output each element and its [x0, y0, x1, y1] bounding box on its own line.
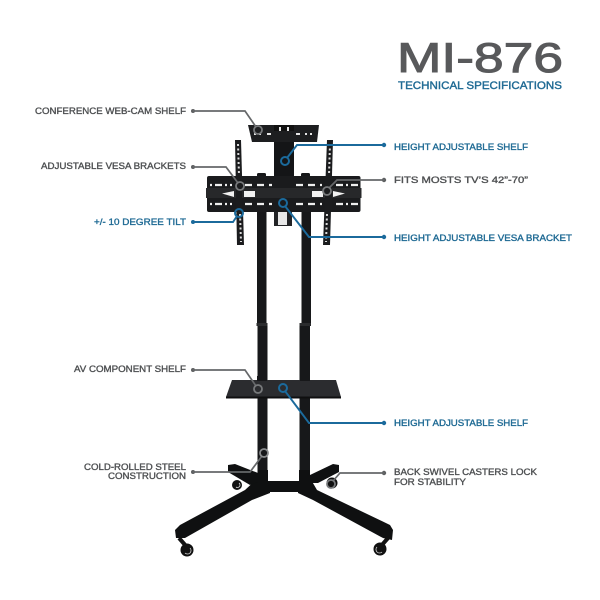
callout: back swivel casters: BACK SWIVEL CASTERS LOCK — [394, 467, 537, 477]
base with casters — [175, 464, 393, 556]
AV component shelf — [226, 376, 341, 398]
callout: AV component shelf: AV COMPONENT SHELF — [74, 364, 187, 374]
callout: height adjustable shelf (lower) — [279, 384, 529, 428]
callout: cold-rolled steel construction: CONSTRUCTION — [108, 471, 186, 481]
callout: conference web-cam shelf — [35, 106, 262, 134]
stand poles — [256, 212, 311, 485]
casters — [179, 478, 388, 556]
title: MI-876 — [397, 34, 563, 81]
callout: AV component shelf — [74, 364, 262, 393]
callout: back swivel casters: FOR STABILITY — [394, 477, 466, 487]
callout: tilt: +/- 10 DEGREE TILT — [94, 217, 187, 227]
VESA horizontal rails — [206, 173, 362, 212]
callout: adjustable VESA brackets — [41, 161, 244, 190]
callout: height adjustable shelf (top): HEIGHT ADJUSTABLE SHELF — [394, 142, 529, 152]
VESA vertical brackets — [235, 140, 333, 245]
callout: height adjustable shelf (top) — [281, 142, 529, 165]
callout: back swivel casters — [327, 467, 537, 488]
callout: fits TV sizes — [323, 175, 528, 195]
webcam shelf — [248, 125, 319, 178]
callout: cold-rolled steel construction: COLD-ROLLED STEEL — [84, 462, 186, 472]
callout: conference web-cam shelf: CONFERENCE WEB-CAM SHELF — [35, 106, 187, 116]
callout: height adjustable VESA bracket: HEIGHT ADJUSTABLE VESA BRACKET — [394, 233, 573, 243]
product illustration: TV stand — [175, 125, 393, 556]
callout: height adjustable VESA bracket — [279, 199, 573, 243]
subtitle: TECHNICAL SPECIFICATIONS — [398, 80, 562, 92]
callout: height adjustable shelf (lower): HEIGHT ADJUSTABLE SHELF — [394, 418, 529, 428]
callout: adjustable VESA brackets: ADJUSTABLE VESA BRACKETS — [41, 161, 186, 171]
callout: fits TV sizes: FITS MOSTS TV’S 42”-70” — [394, 175, 528, 185]
callout: cold-rolled steel construction — [84, 449, 268, 481]
callout: tilt — [94, 209, 243, 227]
